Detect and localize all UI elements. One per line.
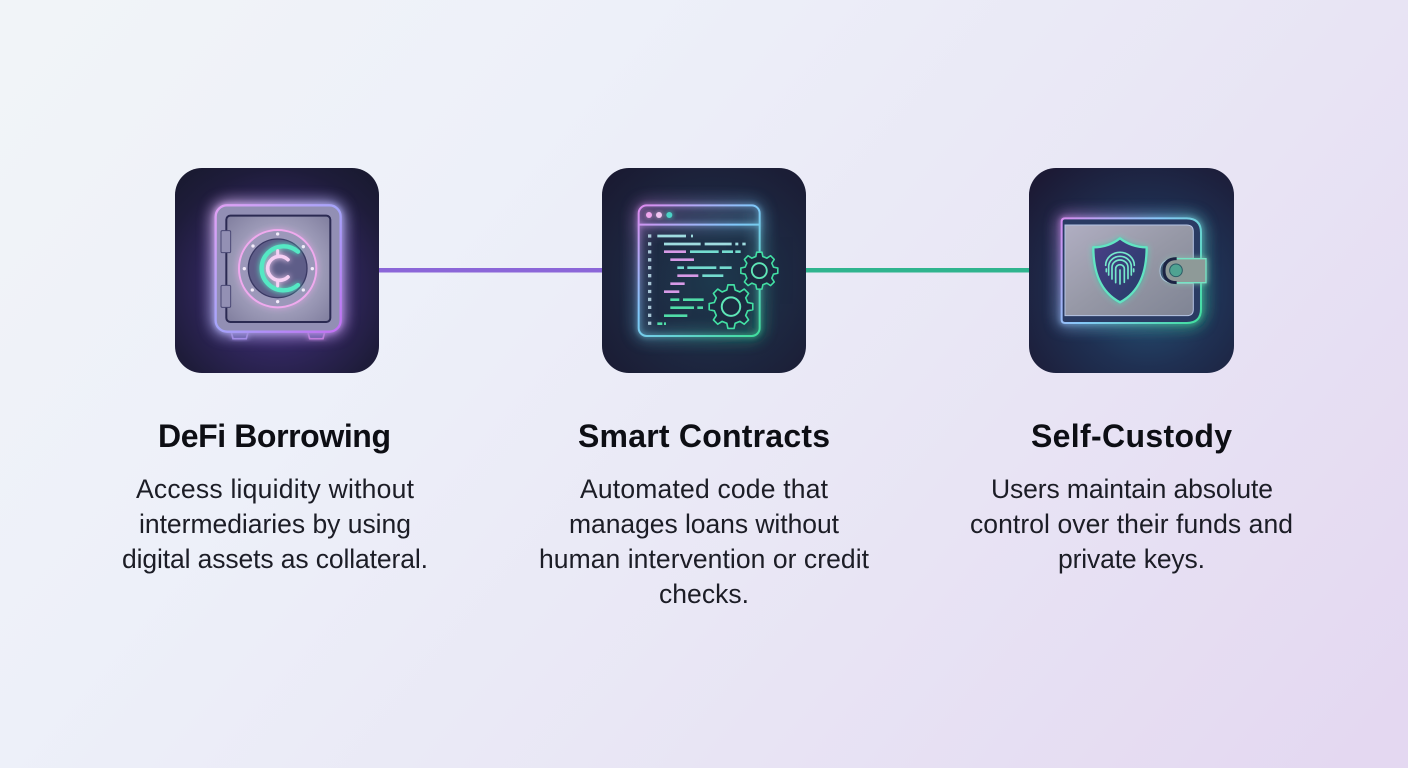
code lines [650,234,746,327]
description: Automated code that [580,474,829,504]
lower hinge [221,285,231,307]
safe feet [231,332,325,339]
dial ring [239,230,316,307]
window frame [639,205,760,336]
large gear [709,285,753,328]
heading: Smart Contracts [578,418,830,454]
heading: Self-Custody [1031,418,1232,454]
icon tile: wallet [1029,168,1234,373]
panel: Self-Custody [970,168,1293,574]
panel: Smart Contracts [539,168,870,609]
description: control over their funds and [970,509,1293,539]
icon: wallet with shield [1062,218,1206,323]
small gear [741,252,778,289]
wallet body [1065,225,1193,316]
description: intermediaries by using [139,509,411,539]
icon: safe with coin dial [216,205,341,339]
dial centre [248,239,307,298]
description: human intervention or credit [539,544,870,574]
clasp snap [1170,264,1182,277]
wallet outline [1062,218,1201,323]
wallet clasp [1164,259,1206,283]
shield [1093,238,1147,302]
icon: code window with gears [639,205,778,336]
fingerprint [1106,252,1134,284]
coin symbol [262,246,298,290]
description: checks. [659,579,749,609]
icon tile: safe [175,168,379,373]
description [970,474,1293,574]
upper hinge [221,231,231,253]
connector: green line [804,268,1032,272]
panel: DeFi Borrowing [122,168,428,574]
safe body [216,205,341,332]
heading: DeFi Borrowing [158,418,391,454]
description: digital assets as collateral. [122,544,428,574]
description [122,474,428,574]
icon tile: code window [602,168,806,373]
description: Users maintain absolute [991,474,1273,504]
description: private keys. [1058,544,1205,574]
window dots [646,212,672,218]
connector: purple line [376,268,604,272]
description [539,474,870,609]
dial ticks [243,232,314,303]
clasp ring [1164,259,1177,283]
description: manages loans without [569,509,840,539]
description: Access liquidity without [136,474,415,504]
safe door [226,216,330,322]
